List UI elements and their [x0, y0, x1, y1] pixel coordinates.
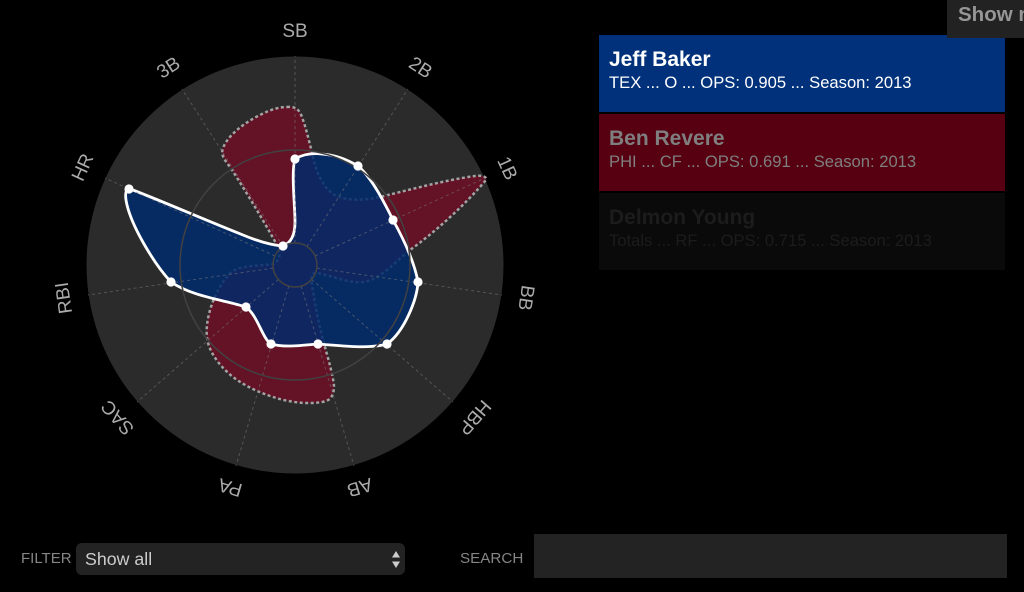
show button: [947, 0, 1024, 38]
axis labels: HBP: [453, 395, 495, 439]
series: Ben Revere (red dotted shape): [207, 107, 486, 403]
axis labels: 1B: [492, 154, 521, 184]
chart background disc: [86, 56, 504, 474]
player card: Delmon Young: Delmon Young: [609, 206, 755, 229]
icon: dropdown arrows: [392, 551, 400, 568]
axis labels: PA: [216, 473, 245, 500]
filter dropdown: [76, 543, 405, 575]
player card: Jeff Baker: Jeff Baker: [609, 48, 711, 71]
axis labels: BB: [513, 284, 538, 312]
axis lines: [88, 56, 502, 466]
search label: SEARCH: [460, 550, 523, 567]
axis labels: AB: [344, 473, 375, 500]
player card: Jeff Baker: [599, 35, 1005, 112]
series: Jeff Baker (blue shape): [126, 154, 418, 347]
player card: Jeff Baker: TEX ... O ... OPS: 0.905 ... Season: 2013: [609, 73, 912, 92]
axis labels: [52, 21, 538, 500]
inner and middle rings: [180, 150, 410, 380]
filter dropdown: Show all: [85, 549, 152, 569]
player card: Delmon Young: Totals ... RF ... OPS: 0.715 ... Season: 2013: [609, 231, 932, 250]
player card: Delmon Young: [599, 193, 1005, 270]
axis labels: HR: [68, 151, 99, 184]
data points: [124, 154, 423, 349]
axis labels: 2B: [405, 53, 436, 83]
search input: [534, 534, 1007, 578]
axis labels: SB: [282, 21, 308, 42]
axis labels: RBI: [52, 281, 77, 315]
player card: Ben Revere: [599, 114, 1005, 191]
player card: Ben Revere: Ben Revere: [609, 127, 725, 150]
filter label: FILTER: [21, 550, 72, 567]
player card: Ben Revere: PHI ... CF ... OPS: 0.691 ... Season: 2013: [609, 152, 916, 171]
axis labels: SAC: [97, 395, 139, 439]
axis labels: 3B: [153, 53, 184, 83]
